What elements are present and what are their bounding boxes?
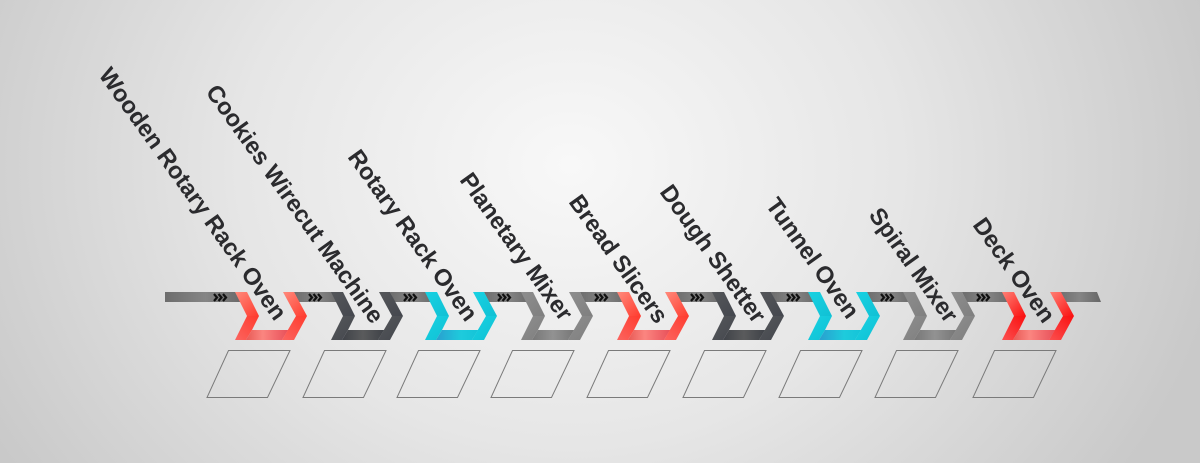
label: Spiral Mixer: Spiral Mixer [863, 203, 962, 328]
label: Cookies Wirecut Machine: Cookies Wirecut Machine [200, 80, 388, 329]
chevron 5: red [617, 292, 689, 340]
label: Tunnel Oven: Tunnel Oven [760, 193, 864, 324]
empty parallelogram boxes [207, 350, 1056, 398]
chevron 3: cyan [425, 292, 497, 340]
label: Bread Slicers: Bread Slicers [563, 190, 672, 329]
label: Dough Shetter: Dough Shetter [654, 180, 770, 328]
chevron 8: gray [903, 292, 975, 340]
label: Planetary Mixer: Planetary Mixer [454, 168, 577, 326]
label: Rotary Rack Oven: Rotary Rack Oven [342, 145, 482, 326]
chevron 2: dark [331, 292, 403, 340]
chevron 1: red [235, 292, 307, 340]
timeline bar [165, 292, 1101, 302]
chevron 6: dark [712, 292, 784, 340]
chevron 9: bright red [1002, 292, 1074, 340]
label: Wooden Rotary Rack Oven: Wooden Rotary Rack Oven [93, 63, 291, 325]
chevron 4: gray [521, 292, 593, 340]
label: Deck Oven: Deck Oven [967, 213, 1060, 328]
chevron 7: cyan [808, 292, 880, 340]
flow arrows [214, 294, 989, 301]
